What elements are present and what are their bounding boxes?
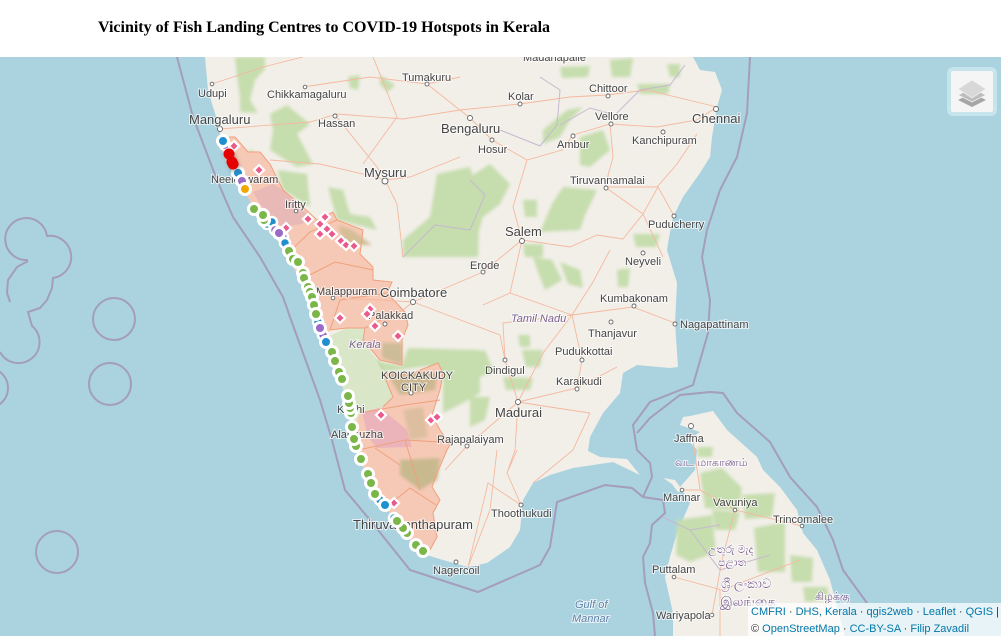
attribution: [748, 603, 1001, 636]
central forest band: [360, 348, 480, 413]
fish landing centre markers: purple: [236, 176, 326, 334]
city labels: Erode: [470, 260, 499, 272]
city labels: KOICKAKUDY: [381, 370, 454, 382]
city labels: Bengaluru: [441, 121, 500, 136]
city dots: [210, 82, 804, 617]
city labels: Kerala: [349, 339, 381, 351]
north Kerala districts: [220, 137, 408, 365]
central Kerala non-hotspot area: [325, 328, 393, 430]
city labels: Jaffna: [674, 433, 705, 445]
city labels: Vavuniya: [713, 497, 758, 509]
city labels: CITY: [401, 382, 427, 394]
maritime boundaries: [0, 57, 867, 636]
city labels: Puducherry: [648, 219, 705, 231]
city labels: Chittoor: [589, 83, 628, 95]
city labels: Mysuru: [364, 165, 407, 180]
city labels: Palakkad: [368, 310, 413, 322]
city labels: Mangaluru: [189, 112, 250, 127]
city labels: Tumakuru: [402, 72, 451, 84]
city labels: Dindigul: [485, 365, 525, 377]
city labels: Puttalam: [652, 564, 695, 576]
state borders: [403, 65, 770, 570]
Kerala state region: [220, 137, 450, 553]
city labels: Wariyapola: [656, 610, 711, 622]
fish landing centre markers: blue: [218, 136, 390, 510]
fish landing centre markers: green: [248, 204, 428, 556]
city labels: Hosur: [478, 144, 508, 156]
landing centres partly hidden: blue and purple crescents: [220, 140, 399, 523]
hotspot diamonds: [229, 141, 442, 508]
city labels: வட மாகாணம்: [675, 457, 748, 469]
brown forest overlays: [338, 225, 440, 490]
district borders: [220, 137, 450, 550]
city labels: Trincomalee: [773, 514, 833, 526]
city labels: Madurai: [495, 405, 542, 420]
city labels: கிழக்கு: [815, 591, 850, 605]
city labels: இலங்கை: [720, 594, 775, 610]
city labels: Gulf of: [575, 599, 608, 611]
city labels: උතුරු මැද: [708, 544, 754, 557]
city labels: Thanjavur: [588, 328, 637, 340]
city labels: Chennai: [692, 111, 741, 126]
city labels: Neeleswaram: [211, 174, 278, 186]
city labels: Tiruvannamalai: [570, 175, 645, 187]
city labels: ශ්‍රී ලංකාව: [721, 576, 771, 592]
city labels: Rajapalaiyam: [437, 434, 504, 446]
city labels: Iritty: [285, 199, 306, 211]
city labels: [189, 52, 850, 625]
city labels: Thoothukudi: [491, 508, 552, 520]
city labels: Thiruvananthapuram: [353, 517, 473, 532]
city labels: Vellore: [595, 111, 629, 123]
city labels: Pudukkottai: [555, 346, 612, 358]
city labels: පළාත: [718, 557, 746, 570]
land: south India: [205, 57, 722, 567]
city labels: Neyveli: [625, 256, 661, 268]
attribution: © OpenStreetMap · CC-BY-SA · Filip Zavadil: [751, 623, 969, 635]
south Kerala districts: [353, 363, 450, 553]
attribution: CMFRI · DHS, Kerala · qgis2web · Leaflet · QGIS |: [751, 606, 999, 618]
land: Mannar island: [663, 478, 683, 492]
city labels: Karaikudi: [556, 376, 602, 388]
city labels: Ambur: [557, 139, 590, 151]
city labels: Hassan: [318, 118, 355, 130]
city labels: Kochi: [337, 404, 365, 416]
city labels: Udupi: [198, 88, 227, 100]
city labels: Kanchipuram: [632, 135, 697, 147]
city labels: Chikkamagaluru: [267, 89, 346, 101]
city labels: Kolar: [508, 91, 534, 103]
city labels: Mannar: [572, 613, 611, 625]
island rings: [0, 218, 71, 363]
layer control icon: [947, 67, 997, 116]
roads: [212, 57, 802, 636]
darker pink hotspot districts: [253, 184, 310, 227]
city labels: Alappuzha: [331, 429, 384, 441]
fish landing centre marker: orange: [240, 184, 250, 194]
city labels: Tamil Nadu: [511, 313, 566, 325]
land: Sri Lanka: [665, 411, 845, 636]
city labels: Malappuram: [316, 286, 377, 298]
red hotspot cluster: [224, 148, 240, 172]
title: Vicinity of Fish Landing Centres to COVID-19 Hotspots in Kerala: [98, 19, 550, 36]
city labels: Coimbatore: [380, 285, 447, 300]
city labels: Mannar: [663, 492, 701, 504]
city labels: Nagapattinam: [680, 319, 748, 331]
forests: [235, 57, 830, 602]
city labels: Salem: [505, 224, 542, 239]
city labels: Kumbakonam: [600, 293, 668, 305]
city labels: Nagercoil: [433, 565, 479, 577]
